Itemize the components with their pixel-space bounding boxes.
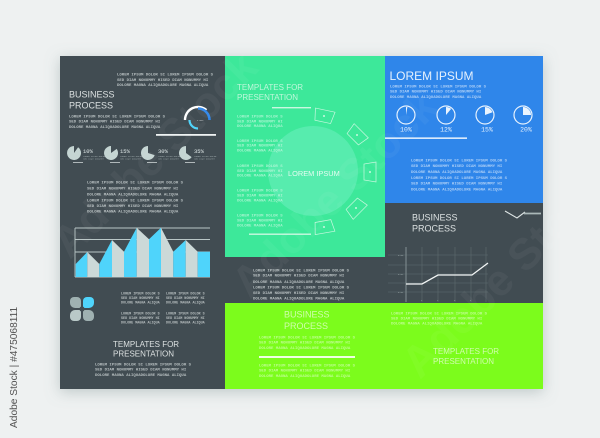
text block: blue intro: LOREM IPSUM DOLOR SI LOREM IPSUM DOLOR S [390,85,487,89]
progress dials [397,106,532,133]
blue divider [385,137,467,139]
text block: left bottom: DOLORE MAGNA ALIQUADOLORE MAGNA ALIQUA [95,374,187,378]
area chart [75,228,210,277]
text block: lime lower: LOREM IPSUM DOLOR SI LOREM IPSUM DOLOR S [259,364,356,368]
text blocks: green list: SED DIAM NONUMMY HI [237,195,283,199]
panel: blue [385,56,543,203]
pie charts row [67,146,217,163]
text block: small column 1: SED DIAM NONUMMY HI [121,297,160,301]
line chart: 1 [421,299,423,302]
text block: small column 2: LOREM IPSUM DOLOR S [166,292,205,296]
text block: small column 2: LOREM IPSUM DOLOR S [166,312,205,316]
text block: small column 1: LOREM IPSUM DOLOR S [121,312,160,316]
central circle [268,126,358,216]
heading: templates lime: TEMPLATES FOR [433,347,499,356]
text block: left middle: DOLORE MAGNA ALIQUADOLORE MAGNA ALIQUA [87,211,179,215]
text block: left bottom: LOREM IPSUM DOLOR SI LOREM IPSUM DOLOR S [95,363,192,367]
text block: small column 2: SED DIAM NONUMMY HI [166,317,205,321]
text block: center dark: SED DIAM NONUMMY HISED DIAM NONUMMY HI [253,275,345,279]
panel: lime center [225,303,385,389]
top divider [272,107,311,108]
text block: center dark: SED DIAM NONUMMY HISED DIAM NONUMMY HI [253,292,345,296]
text block: under heading: SED DIAM NONUMMY HISED DIAM NONUMMY HI [69,121,161,125]
text block: blue body: SED DIAM NONUMMY HISED DIAM NONUMMY HI [411,165,503,169]
line chart: 0.03 [398,254,404,257]
line chart: 3 [454,299,456,302]
heading: templates lime: PRESENTATION [433,357,494,366]
text block: under heading: DOLORE MAGNA ALIQUADOLORE MAGNA ALIQUA [69,126,161,130]
text block: left intro: DOLORE MAGNA ALIQUADOLORE MAGNA ALIQUA [117,84,209,88]
text block: blue body: DOLORE MAGNA ALIQUADOLORE MAGNA ALIQUA [411,171,503,175]
text block: left middle: SED DIAM NONUMMY HISED DIAM NONUMMY HI [87,205,179,209]
heading: templates left: TEMPLATES FOR [113,340,179,349]
heading: business process: PROCESS [69,101,113,111]
icon: four petals [70,297,94,321]
pie charts row: 35% [194,148,205,155]
pie charts row: SED DIAM NONUMMY [158,158,180,160]
text block: center dark: LOREM IPSUM DOLOR SI LOREM IPSUM DOLOR S [253,269,350,273]
gauge chart [185,107,210,128]
text block: lime upper: DOLORE MAGNA ALIQUADOLORE MAGNA ALIQUA [259,347,351,351]
text blocks: green list: DOLORE MAGNA ALIQUA [237,125,283,129]
gauge chart: 4.50% [197,119,204,122]
line chart: 0.01 [398,291,404,294]
text blocks: green list: DOLORE MAGNA ALIQUA [237,149,283,153]
text blocks: green list: DOLORE MAGNA ALIQUA [237,199,283,203]
text blocks: green list: LOREM IPSUM DOLOR S [237,215,283,219]
progress dials: 10% [400,126,412,133]
text block: under heading: LOREM IPSUM DOLOR SI LOREM IPSUM DOLOR S [69,116,166,120]
line chart [388,247,488,302]
orbit cards [313,108,376,235]
text block: small column 2: DOLORE MAGNA ALIQUA [166,301,206,305]
heading: business process lime: BUSINESS [284,309,330,319]
panel: center dark strip [225,257,385,303]
pie charts row: LOREM IPSUM DOLOR [194,155,217,158]
text block: center dark: DOLORE MAGNA ALIQUADOLORE MAGNA ALIQUA [253,281,345,285]
text block: small column 1: LOREM IPSUM DOLOR S [121,292,160,296]
progress dials: 15% [481,126,493,133]
text block: blue intro: DOLORE MAGNA ALIQUADOLORE MAGNA ALIQUA [390,96,482,100]
pie charts row: 15% [120,148,131,155]
text blocks: green list: LOREM IPSUM DOLOR S [237,115,283,119]
pie charts row: SED DIAM NONUMMY [194,158,216,160]
text block: lime upper: SED DIAM NONUMMY HISED DIAM NONUMMY HI [259,342,351,346]
circle label: LOREM IPSUM [288,169,340,178]
text block: center dark: DOLORE MAGNA ALIQUADOLORE MAGNA ALIQUA [253,297,345,301]
text blocks: green list: SED DIAM NONUMMY HI [237,120,283,124]
heading: templates green: TEMPLATES FOR [237,83,303,92]
text block: small column 1: SED DIAM NONUMMY HI [121,317,160,321]
text block: small column 1: DOLORE MAGNA ALIQUA [121,321,161,325]
panel: lime right [385,303,543,389]
text block: blue body: DOLORE MAGNA ALIQUADOLORE MAGNA ALIQUA [411,188,503,192]
text block: lime lower: SED DIAM NONUMMY HISED DIAM NONUMMY HI [259,370,351,374]
text block: left bottom: SED DIAM NONUMMY HISED DIAM NONUMMY HI [95,369,187,373]
text block: lime right: LOREM IPSUM DOLOR SI LOREM IPSUM DOLOR S [391,312,488,316]
text block: lime right: SED DIAM NONUMMY HISED DIAM NONUMMY HI [391,318,483,322]
text block: center dark: LOREM IPSUM DOLOR SI LOREM IPSUM DOLOR S [253,286,350,290]
text block: small column 1: DOLORE MAGNA ALIQUA [121,301,161,305]
pie charts row: LOREM IPSUM DOLOR [120,155,143,158]
text blocks: green list: SED DIAM NONUMMY HI [237,170,283,174]
text block: blue intro: SED DIAM NONUMMY HISED DIAM NONUMMY HI [390,91,482,95]
text blocks: green list: LOREM IPSUM DOLOR S [237,140,283,144]
text block: lime right: DOLORE MAGNA ALIQUADOLORE MAGNA ALIQUA [391,323,483,327]
lime divider [259,356,355,358]
watermark: Adobe Stock [42,42,268,267]
text blocks: green list: SED DIAM NONUMMY HI [237,145,283,149]
text blocks: green list: DOLORE MAGNA ALIQUA [237,224,283,228]
text block: lime upper: LOREM IPSUM DOLOR SI LOREM IPSUM DOLOR S [259,336,356,340]
line chart: 4 [470,299,472,302]
icon: check mark bar [505,211,541,218]
text block: small column 2: SED DIAM NONUMMY HI [166,297,205,301]
progress dials: 20% [520,126,532,133]
panel: right dark [385,203,543,303]
progress dials: 12% [440,126,452,133]
watermark: Adobe Stock [222,82,448,307]
text block: blue body: LOREM IPSUM DOLOR SI LOREM IPSUM DOLOR S [411,177,508,181]
text block: lime lower: DOLORE MAGNA ALIQUADOLORE MAGNA ALIQUA [259,375,351,379]
heading: templates green: PRESENTATION [237,93,298,102]
divider line [156,134,216,136]
text block: left middle: LOREM IPSUM DOLOR SI LOREM IPSUM DOLOR S [87,200,184,204]
stock credit: Adobe Stock | #475068111 [9,306,20,428]
text block: blue body: SED DIAM NONUMMY HISED DIAM NONUMMY HI [411,183,503,187]
line chart: 0.02 [398,273,404,276]
line chart: 2 [437,299,439,302]
heading: business process lime: PROCESS [284,321,328,331]
text block: left intro: SED DIAM NONUMMY HISED DIAM NONUMMY HI [117,79,209,83]
panel: green [225,56,385,257]
text blocks: green list: LOREM IPSUM DOLOR S [237,190,283,194]
text blocks: green list: DOLORE MAGNA ALIQUA [237,175,283,179]
brochure shadow [60,56,543,389]
pie charts row: LOREM IPSUM DOLOR [158,155,181,158]
text blocks: green list: SED DIAM NONUMMY HI [237,220,283,224]
text blocks: green list [237,115,283,228]
heading: business process right: BUSINESS [412,212,458,222]
pie charts row: SED DIAM NONUMMY [120,158,142,160]
watermark [42,42,600,387]
text block: small column 2: DOLORE MAGNA ALIQUA [166,321,206,325]
pie charts row: LOREM IPSUM DOLOR [83,155,106,158]
pie charts row: SED DIAM NONUMMY [83,158,105,160]
heading: templates left: PRESENTATION [113,349,174,358]
pie charts row: 30% [158,148,169,155]
text block: left intro: LOREM IPSUM DOLOR SI LOREM IPSUM DOLOR S [117,74,214,78]
text block: left middle: LOREM IPSUM DOLOR SI LOREM IPSUM DOLOR S [87,182,184,186]
heading: lorem ipsum: LOREM IPSUM [390,69,474,83]
text blocks: green list: LOREM IPSUM DOLOR S [237,165,283,169]
heading: business process: BUSINESS [69,89,115,99]
text block: left middle: DOLORE MAGNA ALIQUADOLORE MAGNA ALIQUA [87,194,179,198]
pie charts row: 10% [83,148,94,155]
text block: left middle: SED DIAM NONUMMY HISED DIAM NONUMMY HI [87,188,179,192]
heading: business process right: PROCESS [412,224,456,234]
text block: blue body: LOREM IPSUM DOLOR SI LOREM IPSUM DOLOR S [411,159,508,163]
panel: left dark [60,56,225,389]
bottom divider [249,234,311,235]
